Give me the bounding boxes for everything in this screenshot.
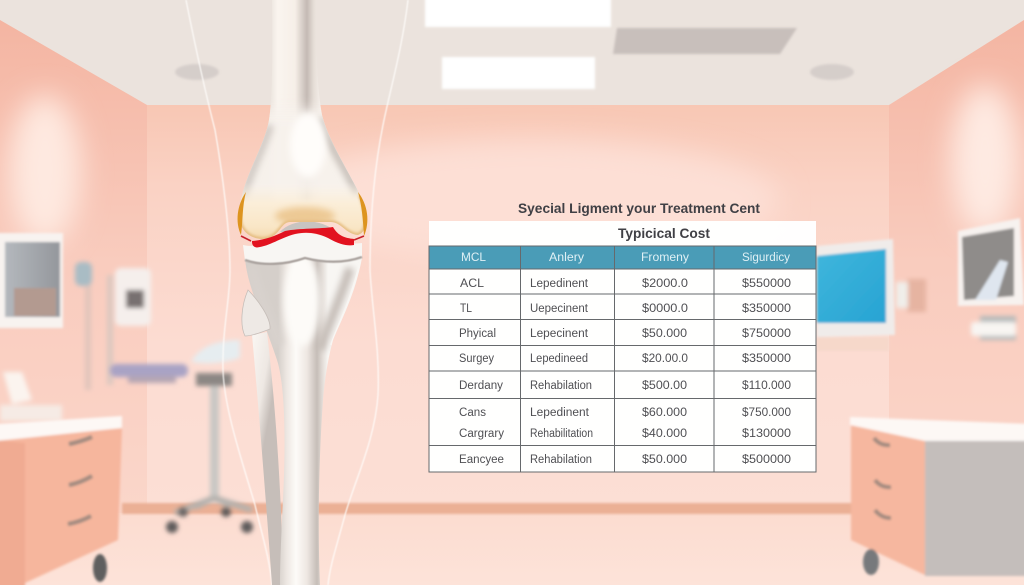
header row: MCL [461, 252, 487, 264]
header row: Anlery [549, 252, 584, 264]
outer orange cartilage left [238, 192, 246, 235]
tibia [245, 258, 362, 585]
row Cargrary: Cargrary [459, 428, 504, 440]
tibial plateau [243, 233, 362, 264]
header row [429, 246, 816, 269]
row Eancyee: Rehabilation [530, 454, 592, 466]
row Cans: Lepedinent [530, 407, 590, 419]
floor [0, 513, 1024, 585]
row Phyical: $50.000 [642, 328, 687, 340]
row ACL: Lepedinent [530, 278, 589, 290]
row TL: $350000 [742, 303, 791, 315]
right wall dispenser [971, 316, 1016, 340]
row Cargrary: Rehabilitation [530, 428, 593, 440]
row TL: $0000.0 [642, 303, 688, 315]
row Derdany: $500.00 [642, 380, 687, 392]
row Eancyee: Eancyee [459, 454, 504, 466]
left wall [0, 20, 147, 560]
table subtitle: Typicical Cost [618, 225, 710, 241]
row Surgey: $350000 [742, 353, 791, 365]
red torn ligament [252, 227, 354, 248]
red ligament edges [241, 236, 364, 241]
row Derdany [459, 380, 791, 392]
row Derdany: Rehabilation [530, 380, 592, 392]
right wall arm [896, 279, 926, 312]
right monitor [817, 239, 895, 351]
header row: Fromeny [641, 252, 689, 264]
table white background [429, 221, 816, 472]
row Cans: $60.000 [642, 407, 687, 419]
row Eancyee: $500000 [742, 454, 791, 466]
exam stool on stand [110, 340, 253, 533]
table grid [429, 246, 816, 472]
left cabinet [0, 416, 122, 585]
row Cans: $750.000 [742, 407, 791, 419]
row Derdany: Derdany [459, 380, 503, 392]
left cabinet handles and wheel [68, 437, 107, 582]
row Surgey: Surgey [459, 353, 494, 365]
row TL [460, 303, 791, 315]
row Cargrary: $40.000 [642, 428, 687, 440]
outer orange cartilage right [358, 192, 367, 236]
row ACL: $2000.0 [642, 278, 688, 290]
left monitor [0, 233, 63, 328]
row TL: TL [460, 303, 473, 315]
row Cans: Cans [459, 407, 486, 419]
femur shading and cartilage [241, 103, 364, 239]
fibula shaft [252, 332, 283, 585]
grey joint gap [280, 222, 336, 232]
row Cans [459, 407, 791, 419]
right cabinet [850, 417, 1024, 576]
row Phyical [459, 328, 791, 340]
femur shaft and condyles [239, 0, 366, 239]
row Cargrary: $130000 [742, 428, 791, 440]
row ACL [460, 278, 791, 290]
row Eancyee: $50.000 [642, 454, 687, 466]
back wall [147, 105, 889, 510]
row Derdany: $110.000 [742, 380, 791, 392]
leg outline [186, 0, 408, 585]
wall glow patches [9, 85, 1019, 260]
row Phyical: Lepecinent [530, 328, 589, 340]
row Surgey [459, 353, 791, 365]
row TL: Uepecinent [530, 303, 589, 315]
tibia shading [282, 260, 356, 352]
row ACL: $550000 [742, 278, 791, 290]
row Surgey: $20.00.0 [642, 353, 688, 365]
table rows [459, 278, 791, 466]
header row: Sigurdicy [742, 252, 790, 264]
row Phyical: Phyical [459, 328, 496, 340]
plateau groove [245, 257, 362, 264]
row Eancyee [459, 454, 791, 466]
cost table [429, 221, 816, 472]
fibula head [242, 290, 270, 336]
table heading: Syecial Ligment your Treatment Cent [518, 201, 761, 216]
right wall cabinet [958, 218, 1024, 306]
knee joint illustration [186, 0, 408, 585]
row Cargrary [459, 428, 791, 440]
left wall equipment [0, 262, 151, 421]
row Surgey: Lepedineed [530, 353, 588, 365]
row Phyical: $750000 [742, 328, 791, 340]
row ACL: ACL [460, 278, 485, 290]
baseboard [122, 503, 867, 514]
ceiling [0, 0, 1024, 110]
right wall [889, 20, 1024, 560]
